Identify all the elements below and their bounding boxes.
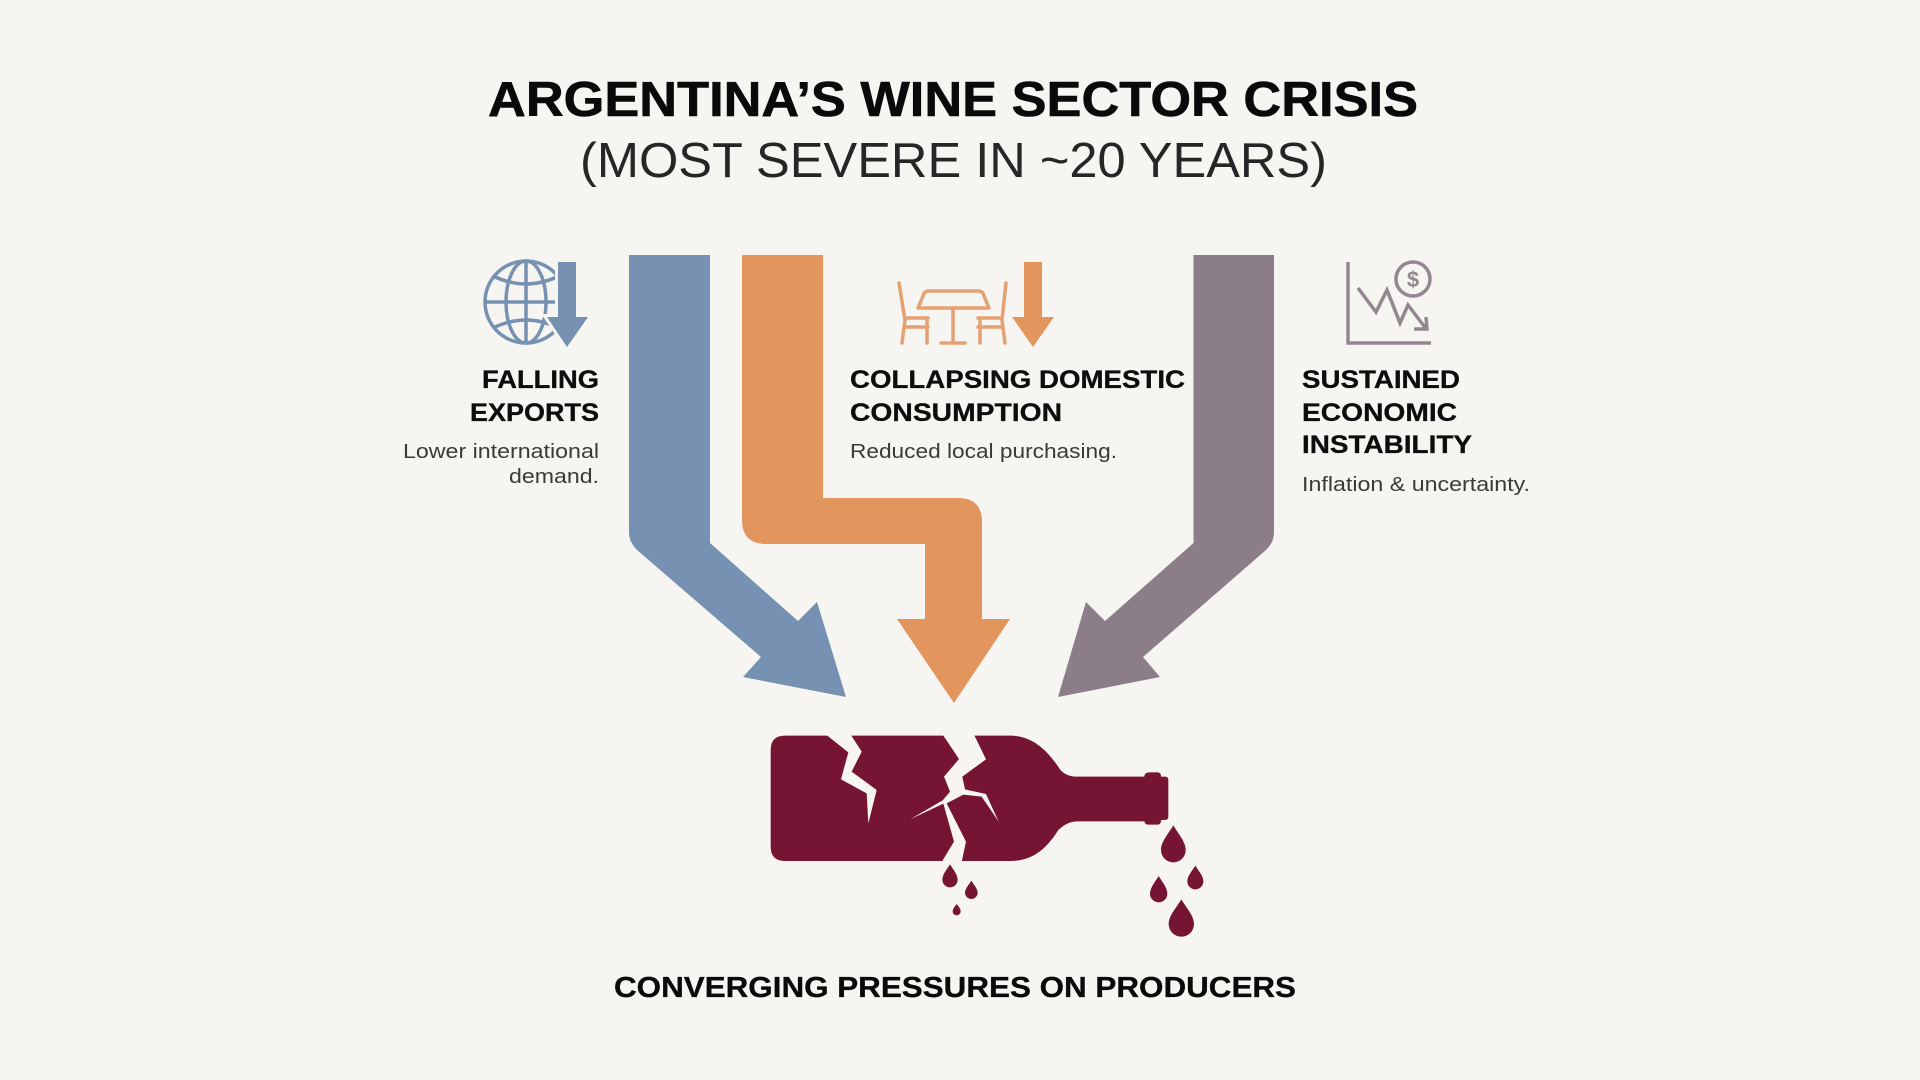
panel: falling exports <box>403 261 599 488</box>
arrow: economic instability <box>1058 255 1274 697</box>
icon: declining chart with dollar coin <box>1348 262 1431 343</box>
title: (MOST SEVERE IN ~20 YEARS) <box>580 134 1327 188</box>
arrow: falling exports <box>629 255 846 697</box>
panel: collapsing domestic consumption <box>850 262 1185 463</box>
heading: sustained economic instability: ECONOMIC <box>1302 399 1457 427</box>
title <box>488 73 1418 188</box>
text: falling exports description: Lower international <box>403 441 599 463</box>
heading: collapsing domestic consumption: CONSUMPTION <box>850 399 1062 427</box>
icon: cracked wine bottle with drops <box>771 735 1203 937</box>
heading: sustained economic instability: INSTABILITY <box>1302 431 1472 459</box>
heading: collapsing domestic consumption <box>850 366 1185 427</box>
heading: falling exports: FALLING <box>482 366 599 394</box>
heading: collapsing domestic consumption: COLLAPSING DOMESTIC <box>850 366 1185 394</box>
arrow: domestic consumption <box>742 255 1010 703</box>
panel: sustained economic instability <box>1302 262 1530 496</box>
text: economic instability description: Inflation & uncertainty. <box>1302 474 1530 496</box>
text: domestic consumption description: Reduced local purchasing. <box>850 441 1117 463</box>
title: ARGENTINA’S WINE SECTOR CRISIS <box>488 73 1418 127</box>
heading: falling exports <box>470 366 599 427</box>
icon: declining chart with dollar coin: $ <box>1407 267 1419 292</box>
text: falling exports description <box>403 441 599 488</box>
icon: table and chairs with down arrow <box>899 262 1054 347</box>
icon: globe with down arrow <box>485 261 588 347</box>
heading: falling exports: EXPORTS <box>470 399 599 427</box>
heading: sustained economic instability <box>1302 366 1472 459</box>
caption: converging pressures: CONVERGING PRESSURES ON PRODUCERS <box>614 972 1296 1004</box>
heading: sustained economic instability: SUSTAINED <box>1302 366 1460 394</box>
text: falling exports description: demand. <box>509 466 599 488</box>
